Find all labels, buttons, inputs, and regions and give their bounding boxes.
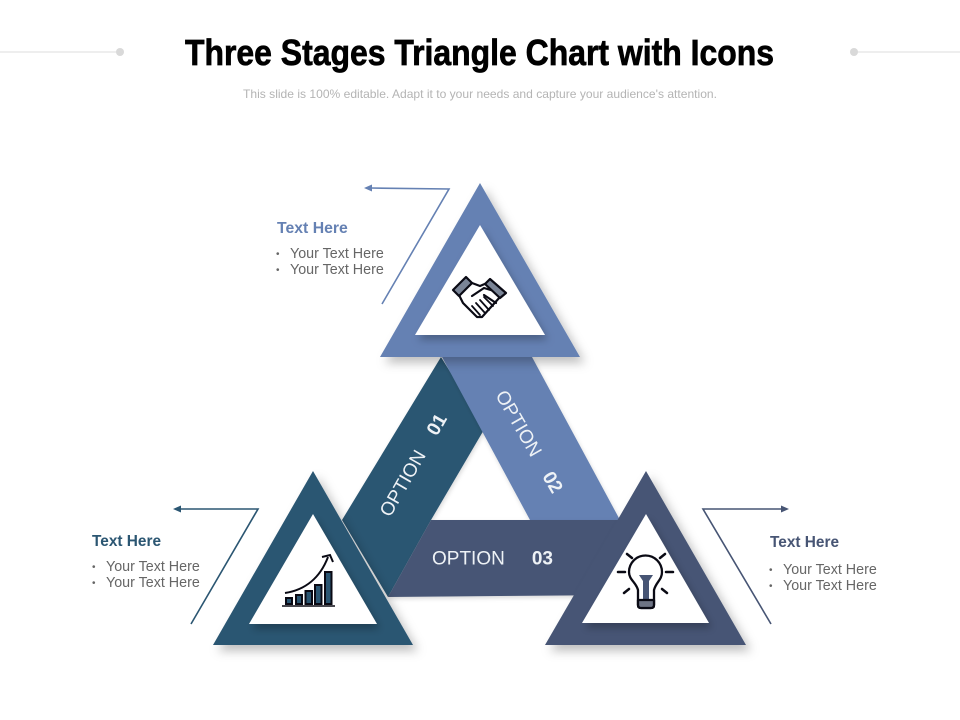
text block: right (769, 534, 877, 594)
triangle: left (213, 471, 413, 645)
icon: light bulb (618, 554, 673, 608)
text block: right: • (769, 581, 773, 592)
text block: top: Your Text Here (290, 246, 384, 262)
band: option 02 (442, 357, 620, 520)
text block: left: Your Text Here (106, 575, 200, 591)
text block: left (92, 533, 200, 591)
triangle: right (545, 471, 746, 645)
band: option 03 (388, 520, 625, 597)
text block: top: • (276, 249, 280, 260)
header decoration: left line (0, 48, 124, 56)
text block: right: Text Here (770, 534, 839, 551)
label: option 03: OPTION 03 (432, 548, 553, 570)
band: option 01 (342, 357, 485, 597)
subtitle: This slide is 100% editable. Adapt it to your needs and capture your audience's attention. (243, 87, 717, 101)
arrow: top callout (364, 184, 449, 304)
text block: left: Text Here (92, 533, 161, 550)
label: option 01: OPTION01 (376, 410, 452, 520)
text block: left: • (92, 562, 96, 573)
arrow: left callout (173, 506, 258, 624)
text block: top: • (276, 265, 280, 276)
arrow: right callout (703, 506, 789, 624)
triangle: top (380, 183, 580, 357)
text block: top: Text Here (277, 220, 348, 237)
title: Three Stages Triangle Chart with Icons (185, 32, 774, 73)
label: option 02: OPTION 02 (491, 387, 566, 497)
text block: left: Your Text Here (106, 559, 200, 575)
icon: growth chart (282, 555, 335, 606)
text block: top (276, 220, 384, 278)
text block: right: Your Text Here (783, 562, 877, 578)
text block: top: Your Text Here (290, 262, 384, 278)
header decoration: right line (850, 48, 960, 56)
icon: handshake (453, 277, 506, 317)
text block: left: • (92, 578, 96, 589)
text block: right: • (769, 565, 773, 576)
text block: right: Your Text Here (783, 578, 877, 594)
